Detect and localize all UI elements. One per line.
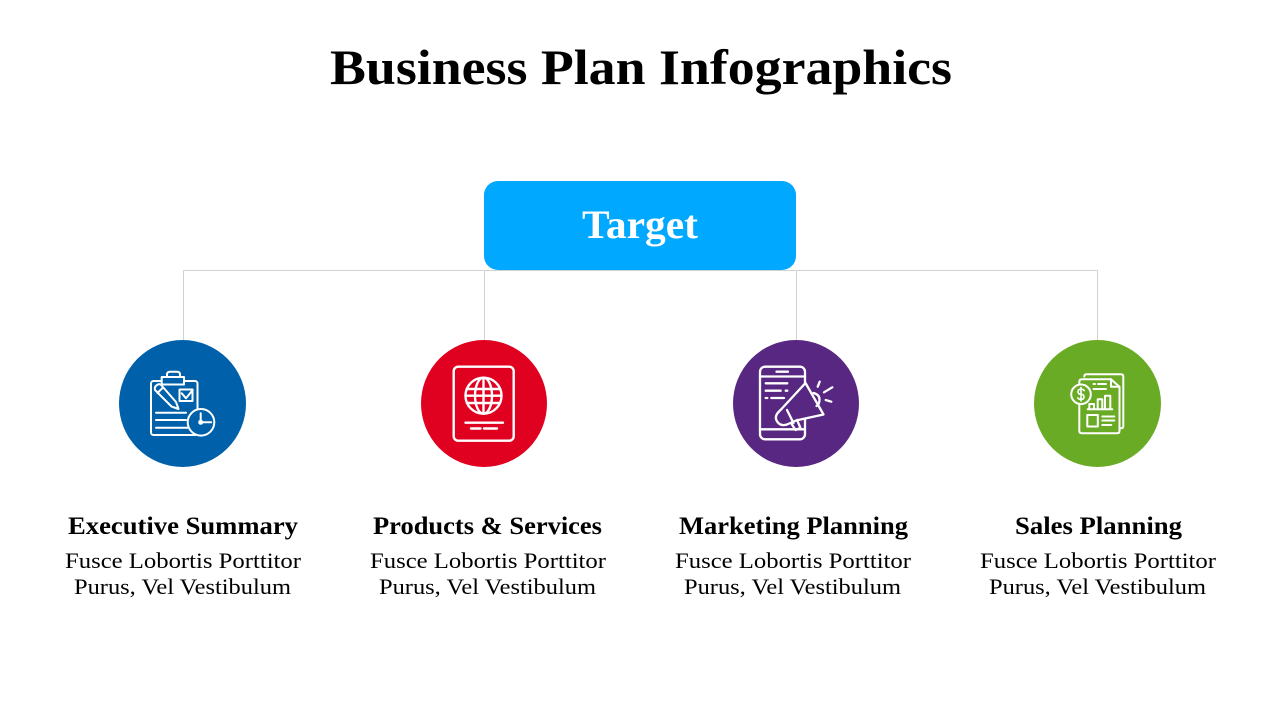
target box — [484, 181, 796, 270]
icon: phone and megaphone — [733, 340, 859, 467]
title: Business Plan Infographics — [330, 39, 952, 95]
text block: Fusce Lobortis Porttitor — [370, 548, 607, 573]
heading: Executive Summary — [68, 513, 299, 540]
text block: Fusce Lobortis Porttitor — [675, 548, 912, 573]
text block: Fusce Lobortis Porttitor — [980, 548, 1217, 573]
text block — [675, 548, 912, 599]
text block: Fusce Lobortis Porttitor — [65, 548, 302, 573]
target box: Target — [582, 202, 699, 247]
icon: clipboard and clock — [119, 340, 246, 467]
text block: Purus, Vel Vestibulum — [989, 574, 1207, 599]
panel: executive summary — [65, 340, 302, 599]
panel: products and services — [370, 340, 607, 599]
heading: Sales Planning — [1015, 513, 1183, 540]
text block — [65, 548, 302, 599]
text block — [980, 548, 1217, 599]
heading: Marketing Planning — [679, 513, 909, 540]
icon: financial report — [1034, 340, 1161, 467]
panel: marketing planning — [675, 340, 912, 599]
panel: sales planning — [980, 340, 1217, 599]
text block: Purus, Vel Vestibulum — [74, 574, 292, 599]
text block: Purus, Vel Vestibulum — [379, 574, 597, 599]
heading: Products & Services — [373, 513, 602, 540]
text block — [370, 548, 607, 599]
text block: Purus, Vel Vestibulum — [684, 574, 902, 599]
connector lines — [184, 270, 1098, 340]
icon: passport — [421, 340, 547, 467]
